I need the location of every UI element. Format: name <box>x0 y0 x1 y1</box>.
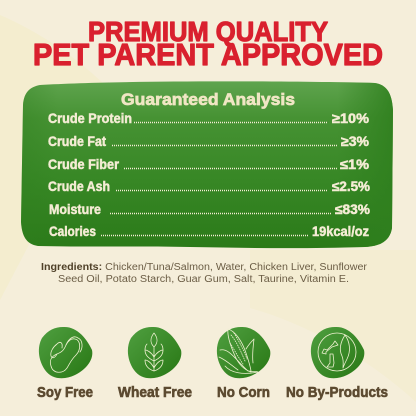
icon: soy free <box>39 327 92 378</box>
row: calories: Calories <box>49 224 96 239</box>
row: calories <box>49 224 369 239</box>
row: moisture <box>49 202 370 217</box>
icon: wheat free <box>128 327 181 378</box>
row: crude ash: ≤2.5% <box>332 179 370 194</box>
row: calories: 19kcal/oz <box>312 224 369 239</box>
row: crude ash: Crude Ash <box>48 179 110 194</box>
row: crude fat <box>48 134 369 149</box>
row: moisture: Moisture <box>49 202 101 217</box>
ingredients text <box>41 262 368 285</box>
ingredients text: Seed Oil, Potato Starch, Guar Gum, Salt, Taurine, Vitamin E. <box>58 274 349 285</box>
title <box>33 16 383 72</box>
panel heading: Guaranteed Analysis <box>121 90 295 109</box>
title: PET PARENT APPROVED <box>33 37 383 72</box>
label: no corn: No Corn <box>217 385 270 401</box>
icon: no corn <box>217 327 270 378</box>
row: crude fat: ≥3% <box>341 134 369 149</box>
label: wheat free: Wheat Free <box>118 385 192 401</box>
icon: no by-products <box>311 327 364 378</box>
row: crude protein: Crude Protein <box>48 111 132 126</box>
label: no by-products: No By-Products <box>286 385 388 401</box>
row: moisture: ≤83% <box>335 202 370 217</box>
row: crude fat: Crude Fat <box>48 134 106 149</box>
row: crude protein: ≥10% <box>332 111 369 126</box>
title: PREMIUM QUALITY <box>88 16 328 47</box>
row: crude fiber: Crude Fiber <box>48 157 120 172</box>
label: soy free: Soy Free <box>37 385 93 401</box>
row: crude protein <box>48 111 369 126</box>
panel: guaranteed analysis <box>21 81 393 248</box>
ingredients text: Ingredients: Chicken/Tuna/Salmon, Water, Chicken Liver, Sunflower <box>41 262 368 273</box>
row: crude ash <box>48 179 370 194</box>
row: crude fiber: ≤1% <box>340 157 369 172</box>
row: crude fiber <box>48 157 369 172</box>
